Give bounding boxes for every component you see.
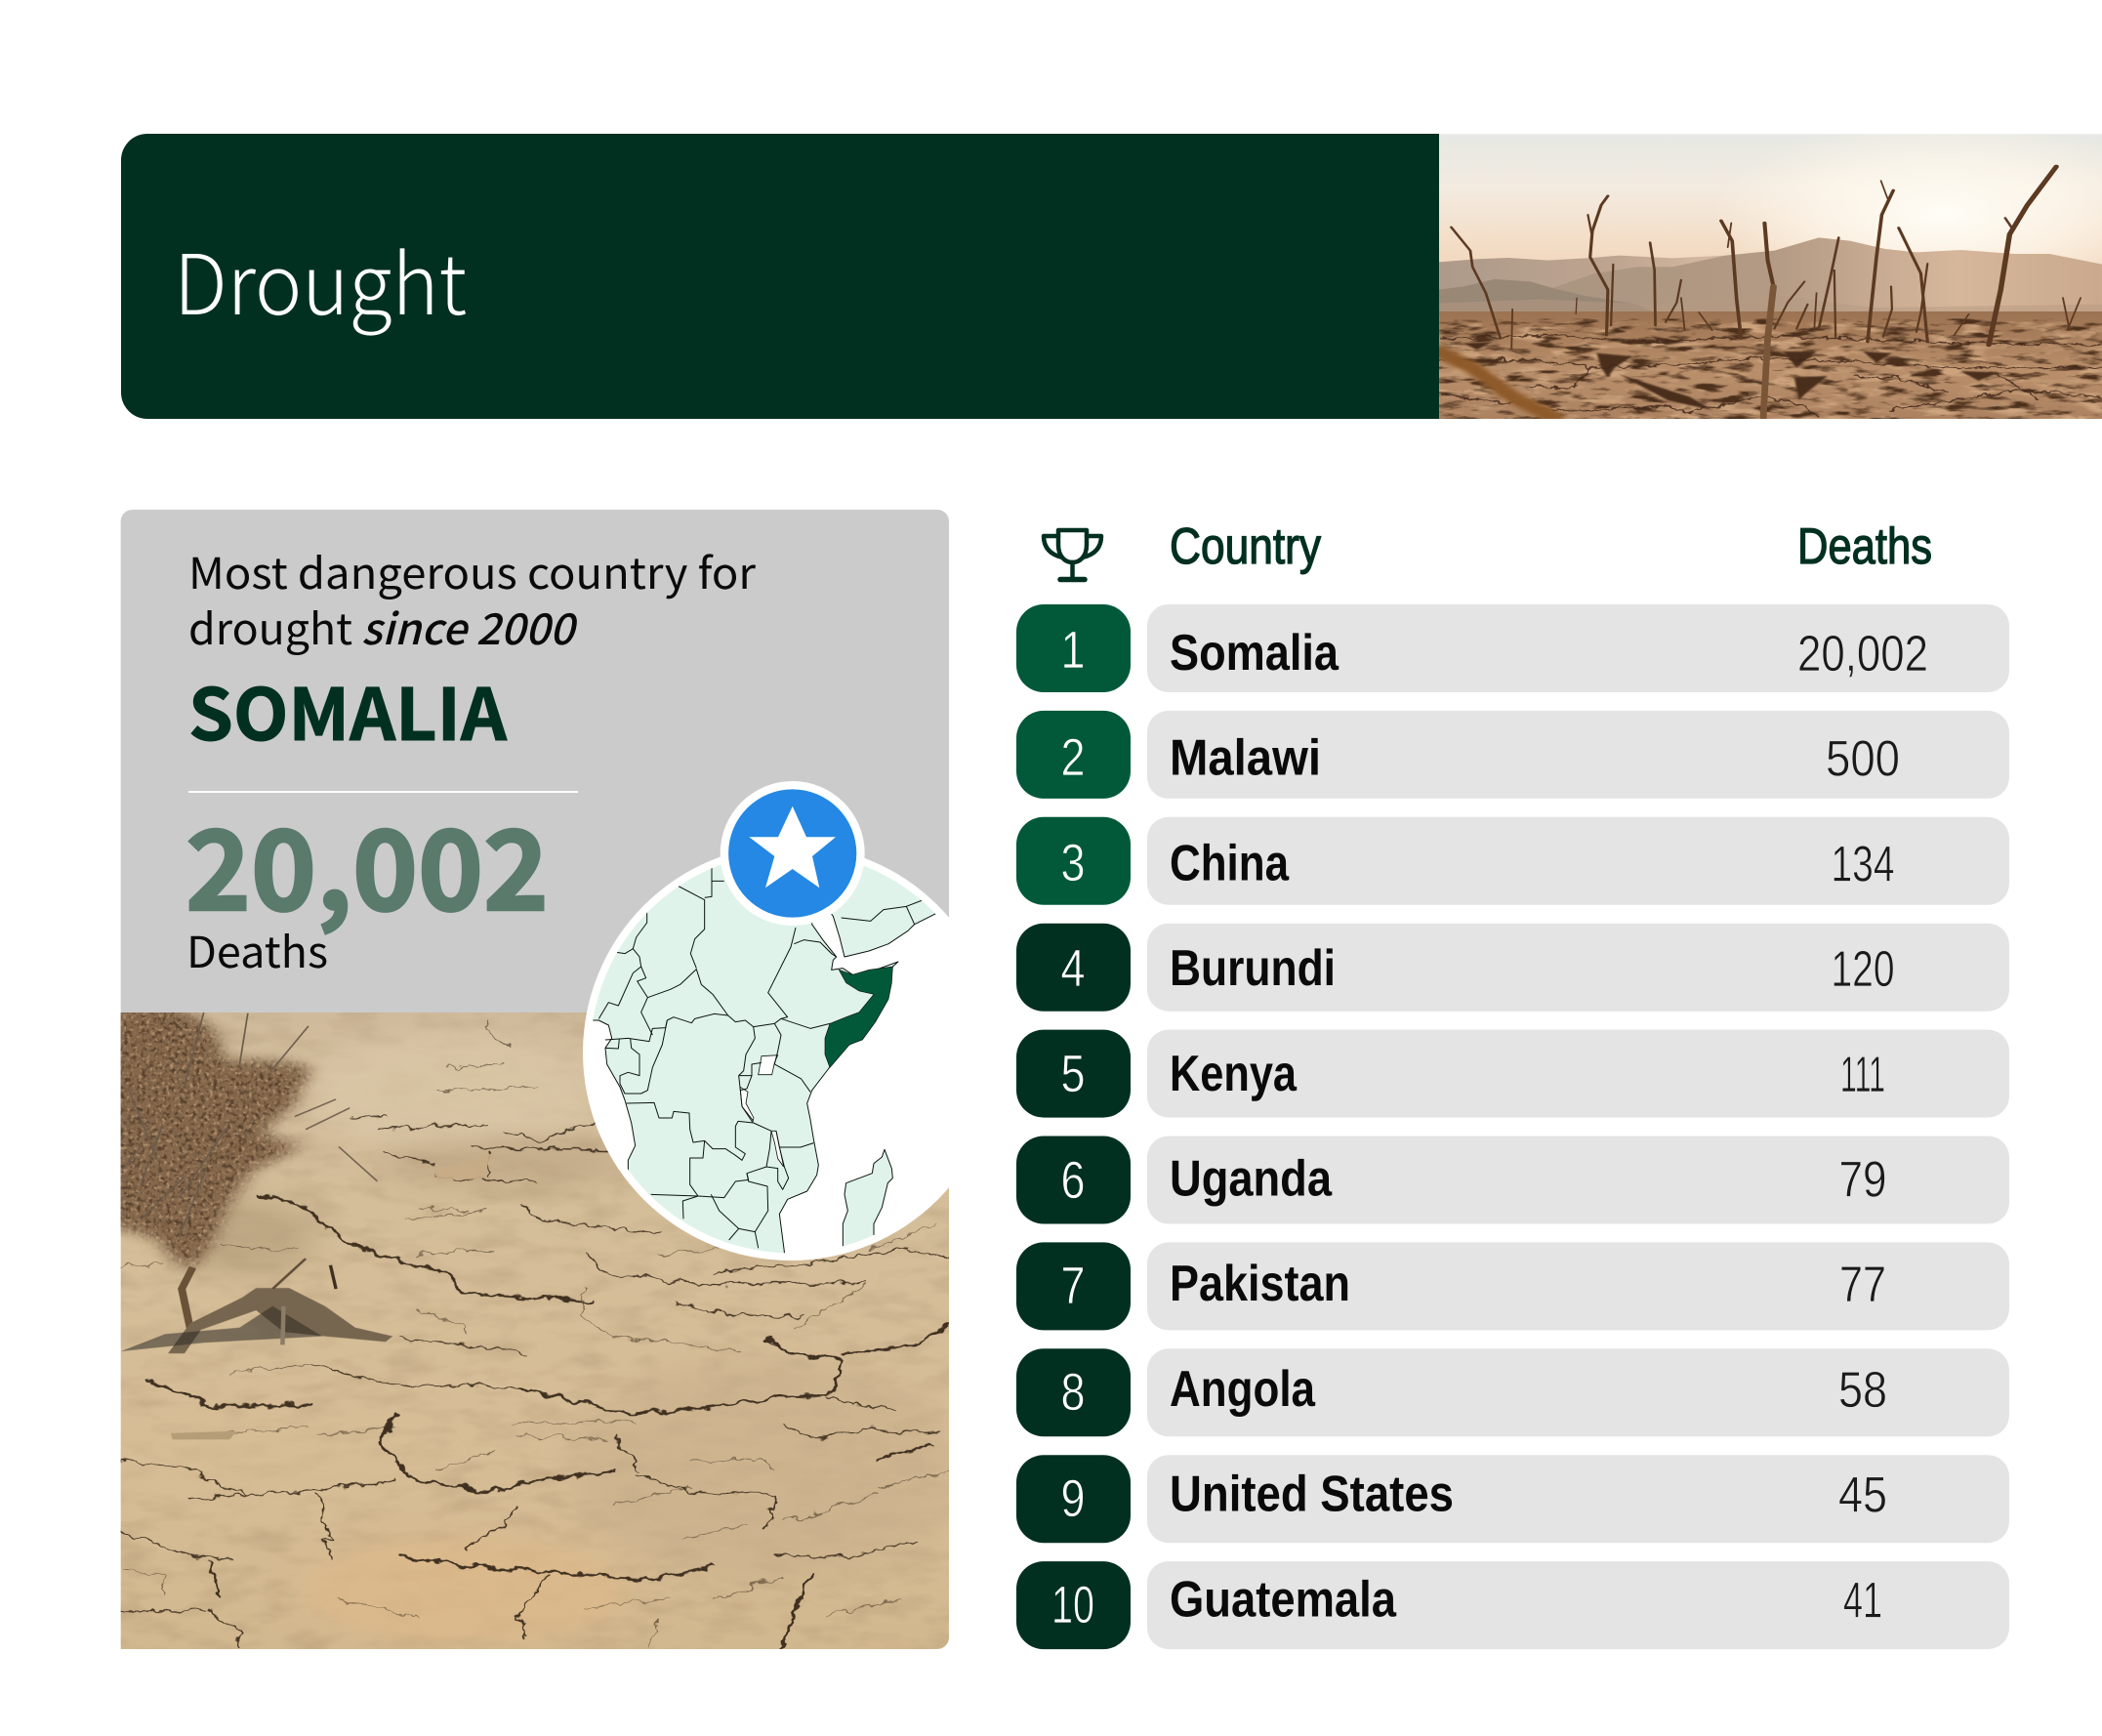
row 6: 79 <box>1839 1152 1886 1209</box>
table: country ranking <box>1016 518 2009 1649</box>
row 1: 1 <box>1060 621 1086 680</box>
row 8 <box>1016 1348 2009 1436</box>
row 6: Uganda <box>1170 1150 1333 1207</box>
row 3 <box>1016 817 2009 905</box>
row 1: Somalia <box>1170 625 1340 682</box>
borders <box>598 862 927 1248</box>
row 6 <box>1016 1137 2009 1224</box>
header dark band <box>121 134 1439 419</box>
row 10 <box>1016 1561 2009 1649</box>
row 5 <box>1016 1030 2009 1118</box>
row 9: 45 <box>1838 1467 1887 1524</box>
row 4 <box>1016 924 2009 1012</box>
map circle: East Africa <box>583 857 949 1261</box>
row 3: 3 <box>1060 834 1086 892</box>
row 1 <box>1016 604 2009 692</box>
header banner <box>121 117 2102 422</box>
column header: Deaths: Deaths <box>1797 518 1932 575</box>
row 10: 41 <box>1843 1572 1882 1629</box>
photo: dead trees on cracked earth <box>1435 117 2102 422</box>
row 7 <box>1016 1242 2009 1330</box>
lakes <box>740 1055 784 1167</box>
row 7: Pakistan <box>1170 1256 1350 1312</box>
row 2: Malawi <box>1170 730 1321 787</box>
intro text: since 2000 <box>361 595 579 657</box>
intro text: drought <box>188 595 352 657</box>
row 10: Guatemala <box>1170 1571 1397 1628</box>
row 2: 500 <box>1826 731 1900 788</box>
intro text <box>190 554 756 655</box>
row 3: 134 <box>1832 836 1894 892</box>
row 4: Burundi <box>1170 940 1336 997</box>
row 9: 9 <box>1060 1469 1086 1528</box>
photo: cracked sand with dry bush <box>97 1005 967 1652</box>
row 2 <box>1016 711 2009 799</box>
row 7: 7 <box>1060 1257 1086 1315</box>
row 9: United States <box>1170 1467 1454 1523</box>
row 2: 2 <box>1060 728 1086 787</box>
row 6: 6 <box>1060 1151 1086 1210</box>
row 3: China <box>1170 835 1290 891</box>
row 4: 120 <box>1832 941 1894 998</box>
row 5: Kenya <box>1170 1046 1298 1102</box>
Somalia highlighted <box>825 967 892 1067</box>
heading: Drought: Drought <box>174 219 467 339</box>
death count: 20,002 <box>185 782 549 942</box>
intro text: Most dangerous country for <box>188 539 757 601</box>
country name: SOMALIA <box>188 658 508 762</box>
deaths label: Deaths <box>186 918 328 980</box>
dry roots <box>121 1259 392 1353</box>
icon: trophy <box>1044 530 1101 580</box>
row 10: 10 <box>1051 1576 1094 1634</box>
row 7: 77 <box>1839 1257 1886 1313</box>
flag badge: star of Somalia <box>721 781 865 926</box>
panel grey background <box>121 510 949 1013</box>
row 9 <box>1016 1455 2009 1543</box>
row 1: 20,002 <box>1797 626 1928 682</box>
row 4: 4 <box>1060 939 1086 998</box>
row 8: 58 <box>1838 1362 1887 1419</box>
row 5: 111 <box>1840 1047 1885 1103</box>
land <box>593 865 936 1254</box>
row 8: 8 <box>1060 1363 1086 1422</box>
column header: Country: Country <box>1170 518 1321 575</box>
row 8: Angola <box>1170 1361 1316 1418</box>
bush <box>121 1013 378 1328</box>
row 5: 5 <box>1060 1045 1086 1103</box>
panel: most dangerous country <box>121 510 949 1649</box>
